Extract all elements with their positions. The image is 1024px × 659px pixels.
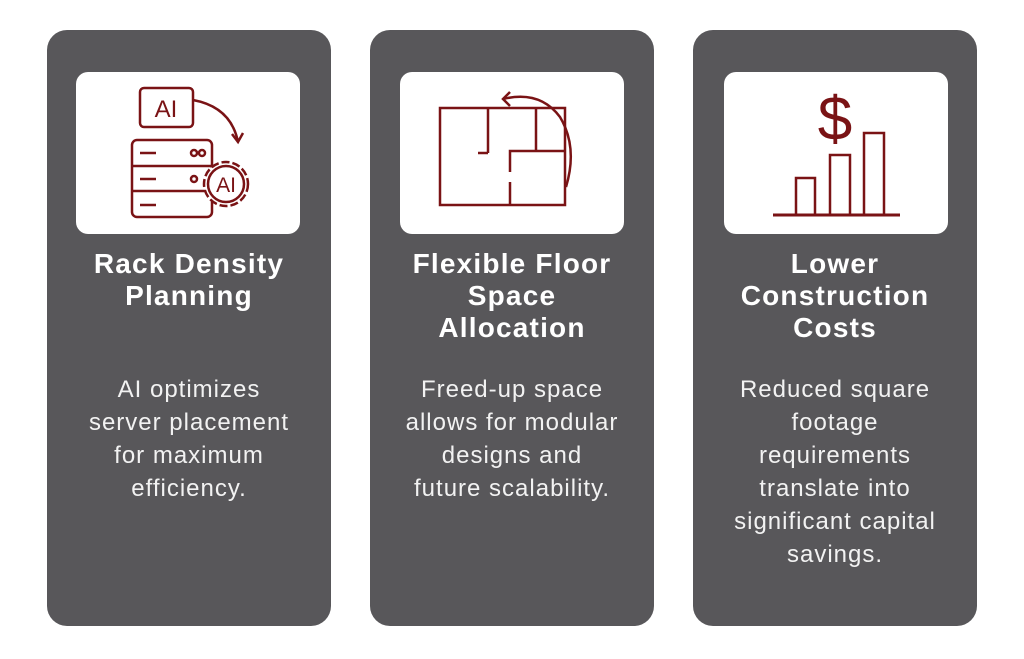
text block: significant capital <box>734 508 936 535</box>
text block: server placement <box>89 409 289 436</box>
heading <box>94 248 284 311</box>
heading: Rack Density <box>94 248 284 279</box>
text block <box>89 376 289 502</box>
heading: Lower <box>791 248 879 279</box>
icon: floor plan <box>400 72 624 234</box>
heading: Construction <box>741 280 929 311</box>
text block: future scalability. <box>414 475 610 502</box>
heading <box>741 248 929 343</box>
text block: allows for modular <box>406 409 618 436</box>
text block: designs and <box>442 442 582 469</box>
heading: Costs <box>793 312 877 343</box>
text block: efficiency. <box>131 475 247 502</box>
icon: AI server <box>76 72 300 234</box>
icon: dollar bar chart <box>724 72 948 234</box>
icon: AI server: AI <box>155 96 177 123</box>
heading: Flexible Floor <box>413 248 611 279</box>
text block: savings. <box>787 541 883 568</box>
text block: footage <box>791 409 879 436</box>
heading: Planning <box>125 280 253 311</box>
icon: AI server: AI <box>216 174 236 197</box>
icon: dollar bar chart: $ <box>818 85 852 154</box>
panel: rack density <box>47 30 331 626</box>
panel: construction costs <box>693 30 977 626</box>
heading <box>413 248 611 343</box>
text block: for maximum <box>114 442 264 469</box>
text block: Reduced square <box>740 376 930 403</box>
panel: floor space <box>370 30 654 626</box>
text block: AI optimizes <box>118 376 260 403</box>
text block <box>734 376 936 568</box>
text block: translate into <box>759 475 911 502</box>
text block: Freed-up space <box>421 376 603 403</box>
text block <box>406 376 618 502</box>
text block: requirements <box>759 442 911 469</box>
heading: Allocation <box>438 312 586 343</box>
heading: Space <box>468 280 556 311</box>
